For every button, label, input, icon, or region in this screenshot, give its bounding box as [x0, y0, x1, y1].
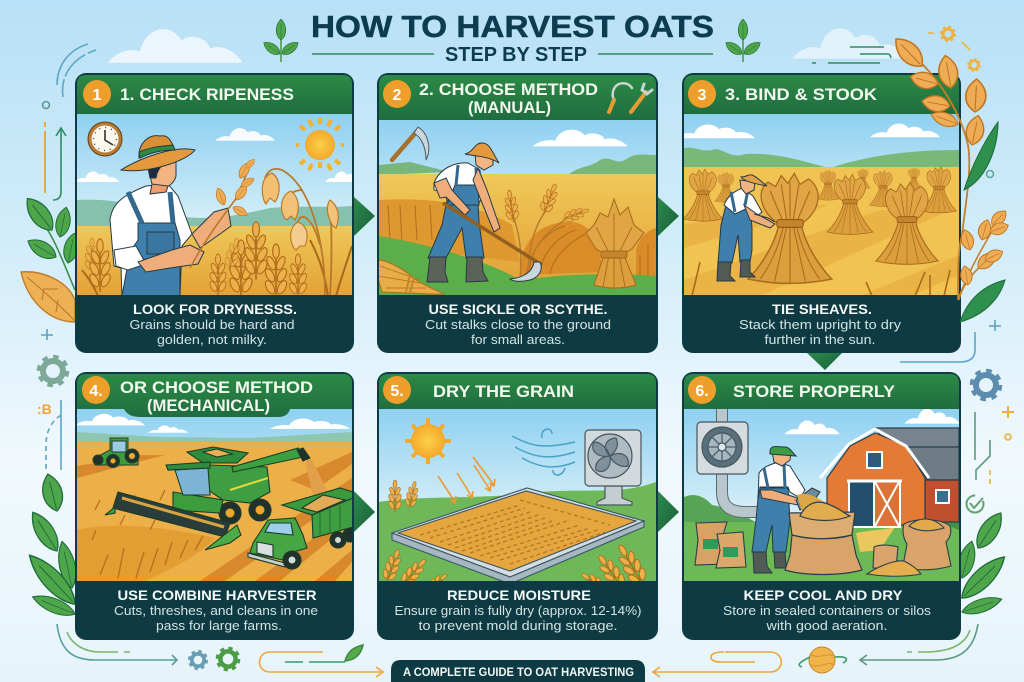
caption 5 — [394, 587, 642, 633]
caption 1: LOOK FOR DRYNESSS. — [133, 301, 297, 317]
icon: header tools — [609, 83, 652, 112]
illustration 4 — [75, 409, 357, 582]
caption 4: pass for large farms. — [156, 619, 282, 633]
decoration: left top swooshes and arrow — [42, 44, 96, 200]
header 4: (MECHANICAL) — [147, 396, 270, 415]
grain texture — [420, 500, 610, 564]
wheat decorations — [382, 480, 646, 581]
drying tray with grain — [392, 488, 644, 584]
illustration 5 — [379, 409, 656, 598]
header 1: 1 — [93, 87, 102, 104]
header 6: 6. — [695, 383, 709, 400]
header 4: 4. — [89, 383, 103, 400]
illustration 3 — [675, 114, 959, 296]
farmer with scythe — [427, 143, 542, 282]
caption 6: KEEP COOL AND DRY — [744, 587, 903, 603]
big sack — [785, 502, 862, 574]
caption 2 — [425, 301, 611, 347]
caption 4: Cuts, threshes, and cleans in one — [114, 604, 318, 618]
panel 4: choose method mechanical — [75, 372, 357, 640]
decoration: right lower leaves — [955, 508, 1011, 618]
header 5: 5. — [390, 383, 404, 400]
decoration: left plant with orange leaf — [20, 193, 81, 322]
header 5: DRY THE GRAIN — [433, 382, 574, 401]
arrow: bottom right orange flow — [653, 652, 781, 677]
caption 5: REDUCE MOISTURE — [447, 587, 591, 603]
grain truck — [248, 488, 357, 569]
arrow: step 5 to 6 — [658, 491, 679, 532]
fan — [585, 430, 641, 505]
arrow: bottom right green flow — [860, 624, 978, 665]
decoration: left mid lines — [37, 400, 61, 470]
icon: title sprig right — [723, 19, 763, 62]
caption 2: for small areas. — [471, 333, 565, 347]
sun arrows — [438, 457, 495, 503]
drooping oat plant — [262, 169, 338, 296]
plus mark left — [41, 329, 53, 340]
illustration 1 — [74, 114, 365, 299]
farmer binding — [717, 175, 775, 281]
icon: scythe — [392, 127, 429, 160]
arrow: step 3 to 6 — [807, 353, 842, 370]
caption 3: further in the sun. — [764, 333, 876, 347]
decoration: wheat right top — [889, 33, 998, 300]
plus mark right — [989, 320, 1001, 331]
icon: sun — [296, 118, 344, 170]
icon: gear left — [39, 357, 67, 385]
header 3: 3. BIND & STOOK — [725, 85, 878, 104]
caption 1: Grains should be hard and — [130, 318, 295, 332]
caption 5: Ensure grain is fully dry (approx. 12-14%) — [394, 604, 642, 618]
caption 2: Cut stalks close to the ground — [425, 318, 611, 332]
header 2: 2 — [393, 87, 402, 104]
caption 1 — [130, 301, 297, 347]
grain stream — [797, 494, 825, 512]
header 2: 2. CHOOSE METHOD — [419, 80, 598, 99]
oat sprig in hand — [190, 157, 257, 268]
farmer pouring — [752, 446, 820, 573]
caption 3: Stack them upright to dry — [739, 318, 902, 332]
icon: clock — [88, 122, 122, 156]
caption 4: USE COMBINE HARVESTER — [118, 587, 316, 603]
duct — [722, 409, 770, 512]
illustration 2 — [376, 120, 656, 296]
icon: check mark — [966, 496, 984, 512]
small feed bags — [695, 522, 746, 568]
small grain pile and sacks — [867, 519, 951, 576]
header 4 — [77, 374, 352, 417]
header 2: (MANUAL) — [468, 98, 551, 117]
fan box — [697, 422, 748, 474]
caption 2: USE SICKLE OR SCYTHE. — [428, 301, 608, 317]
arrow: step 2 to 3 — [658, 197, 679, 236]
barn — [820, 428, 959, 527]
footer label: A COMPLETE GUIDE TO OAT HARVESTING — [403, 667, 634, 679]
header 3: 3 — [698, 87, 707, 104]
caption 3 — [739, 301, 902, 347]
header 1: 1. CHECK RIPENESS — [120, 85, 294, 104]
caption 4 — [114, 587, 318, 633]
header 2 — [379, 75, 656, 120]
small sheaf — [376, 260, 444, 294]
cloud top right — [792, 28, 908, 59]
icon: gear right — [972, 371, 1000, 399]
header 4: OR CHOOSE METHOD — [120, 378, 313, 397]
header 3 — [684, 75, 959, 114]
decoration: right mid lines — [900, 332, 1014, 488]
farmer — [110, 136, 231, 296]
wind lines — [512, 429, 575, 475]
panel 6: store properly — [682, 372, 961, 640]
panel 2: choose method manual — [376, 73, 658, 353]
footer label — [391, 660, 645, 682]
decoration: left lower leaves — [23, 472, 82, 620]
arrow: bottom left flow — [57, 624, 177, 665]
header 1 — [77, 75, 352, 114]
decoration: left mid lines: :B — [37, 401, 52, 417]
arrow: step 4 to 5 — [354, 491, 375, 532]
caption 6: with good aeration. — [765, 619, 888, 633]
icon: title sprig left — [261, 19, 301, 62]
grain chute — [305, 460, 328, 496]
cloud top left — [108, 29, 242, 63]
caption 3: TIE SHEAVES. — [772, 301, 872, 317]
caption 6: Store in sealed containers or silos — [723, 604, 931, 618]
caption 1: golden, not milky. — [157, 333, 267, 347]
panel 1: check ripeness — [74, 73, 365, 353]
header 6 — [684, 374, 959, 409]
caption 5: to prevent mold during storage. — [418, 619, 618, 633]
sheaf — [586, 199, 644, 289]
subtitle: STEP BY STEP — [445, 44, 587, 66]
header 6: STORE PROPERLY — [733, 382, 896, 401]
caption 6 — [723, 587, 931, 633]
panel 3: bind and stook — [675, 73, 961, 353]
arrow: bottom orange flow with leaf — [260, 645, 383, 677]
sun with rays — [405, 418, 451, 464]
illustration 6 — [684, 409, 960, 581]
title: HOW TO HARVEST OATS — [311, 9, 714, 44]
combine harvester — [105, 447, 310, 550]
icon: bottom gears — [189, 648, 239, 670]
decoration: right top gears and lines — [812, 27, 994, 178]
decoration: right wheat lower — [958, 207, 1010, 322]
icon: planet — [799, 647, 846, 673]
panel 5: dry the grain — [377, 372, 658, 640]
arrow: step 1 to 2 — [354, 197, 375, 236]
tractor — [93, 438, 139, 468]
header 5 — [379, 374, 656, 409]
